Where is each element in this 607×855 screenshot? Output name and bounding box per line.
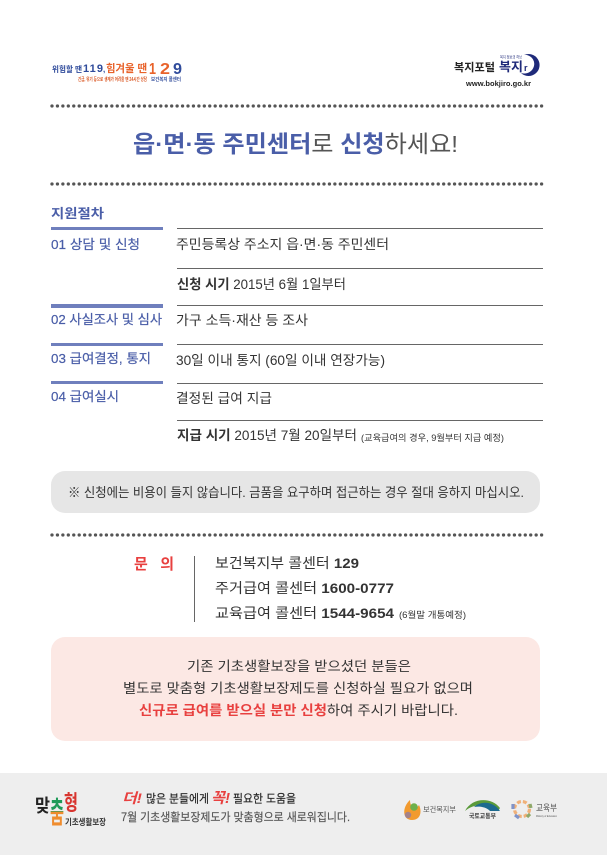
footer message: 필요한 도움을 <box>233 792 296 806</box>
title: 읍·면·동 주민센터로 신청하세요! <box>133 131 458 157</box>
logo: customized basic livelihood: 기초생활보장 <box>65 817 106 827</box>
footer message: 더! <box>122 790 142 806</box>
contact list: 주거급여 콜센터 1600-0777 <box>215 580 394 596</box>
footer band <box>0 773 607 855</box>
payment period: 지급 시기 2015년 7월 20일부터 <box>177 428 357 443</box>
step 03: 03 급여결정, 통지 <box>51 351 151 366</box>
step 02: 02 사실조사 및 심사 <box>51 312 162 327</box>
callout: existing recipients: 기존 기초생활보장을 받으셨던 분들은 <box>187 659 411 674</box>
detail text: 주민등록상 주소지 읍·면·동 주민센터 <box>176 237 389 252</box>
logo: bokjiro portal: 복지 정보의 허브 <box>500 54 522 60</box>
logo: customized basic livelihood: 형 <box>64 792 78 815</box>
panel: procedure steps <box>51 227 163 404</box>
footer message: 꼭! <box>211 790 230 807</box>
step 04 <box>51 381 163 404</box>
divider <box>52 104 542 108</box>
logo: bokjiro portal: 복지 <box>499 60 523 74</box>
step 04: 04 급여실시 <box>51 389 119 404</box>
footer message: 많은 분들에게 <box>146 792 209 806</box>
payment footnote: (교육급여의 경우, 9월부터 지급 예정) <box>361 432 504 443</box>
callout: no fee notice: ※ 신청에는 비용이 들지 않습니다. 금품을 요구하며 접근하는 경우 절대 응하지 마십시오. <box>68 485 524 500</box>
footer message: 7월 기초생활보장제도가 맞춤형으로 새로워집니다. <box>121 810 350 824</box>
logo: bokjiro portal: r <box>524 63 528 73</box>
heading: support procedure: 지원절차 <box>51 206 104 221</box>
divider <box>52 182 542 186</box>
heading: inquiries: 문 의 <box>134 556 174 573</box>
logo: bokjiro portal: www.bokjiro.go.kr <box>465 79 531 88</box>
logo: ministry of health and welfare <box>404 800 456 820</box>
detail text: 결정된 급여 지급 <box>176 391 272 406</box>
step 01: 01 상담 및 신청 <box>51 237 140 252</box>
logo: ministry of land <box>465 800 500 820</box>
logo: ministry of education <box>513 802 557 818</box>
contact list: 교육급여 콜센터 1544-9654 <box>215 605 394 621</box>
logo: customized basic livelihood: 춤 <box>50 797 64 830</box>
detail text: 30일 이내 통지 (60일 이내 연장가능) <box>176 353 385 368</box>
application period: 신청 시기 2015년 6월 1일부터 <box>177 277 346 292</box>
logo: emergency 119 / 129 hotline: 긴급, 위기 등으로 생계가 어려울 땐 24시간 상담 <box>78 76 147 83</box>
logo: emergency 119 / 129 hotline: 9 <box>173 61 182 78</box>
logo: ministry of education: Ministry of Education <box>536 814 557 818</box>
logo: ministry of health and welfare: 보건복지부 <box>423 804 456 814</box>
logo: customized basic livelihood: 맞 <box>35 796 50 816</box>
logo: emergency 119 / 129 hotline: 1 <box>149 61 156 78</box>
detail text: 가구 소득·재산 등 조사 <box>176 313 309 328</box>
callout: no fee notice <box>51 471 540 513</box>
logo: customized basic livelihood <box>35 792 106 830</box>
logo: emergency 119 / 129 hotline <box>52 61 182 83</box>
logo: ministry of land: 국토교통부 <box>469 812 496 820</box>
logo: emergency 119 / 129 hotline: 2 <box>160 61 170 78</box>
step 03 <box>51 343 163 366</box>
logo: emergency 119 / 129 hotline: , <box>103 65 105 74</box>
logo: emergency 119 / 129 hotline: 119 <box>83 63 103 75</box>
contact list: 보건복지부 콜센터 129 <box>215 555 359 571</box>
callout: existing recipients: 별도로 맞춤형 기초생활보장제도를 신청하실 필요가 없으며 <box>123 681 473 696</box>
logo: bokjiro portal: 복지포털 <box>454 61 495 74</box>
contact list <box>215 555 466 621</box>
footer message <box>121 790 350 824</box>
logo: emergency 119 / 129 hotline: 힘겨울 땐 <box>106 61 147 75</box>
callout: existing recipients <box>51 637 540 741</box>
callout: existing recipients: 신규로 급여를 받으실 분만 신청 하여 주시기 바랍니다. <box>139 703 458 718</box>
step 01 <box>51 227 163 252</box>
logo: ministry of education: 교육부 <box>536 803 557 813</box>
panel: procedure details <box>176 228 543 443</box>
logo: emergency 119 / 129 hotline: 위험할 땐 <box>52 64 82 74</box>
step 02 <box>51 304 163 327</box>
contact list: (6월말 개통예정) <box>399 609 466 620</box>
logo: emergency 119 / 129 hotline: 보건복지 콜센터 <box>151 76 181 83</box>
logo: bokjiro portal <box>454 54 540 88</box>
divider <box>52 533 542 537</box>
